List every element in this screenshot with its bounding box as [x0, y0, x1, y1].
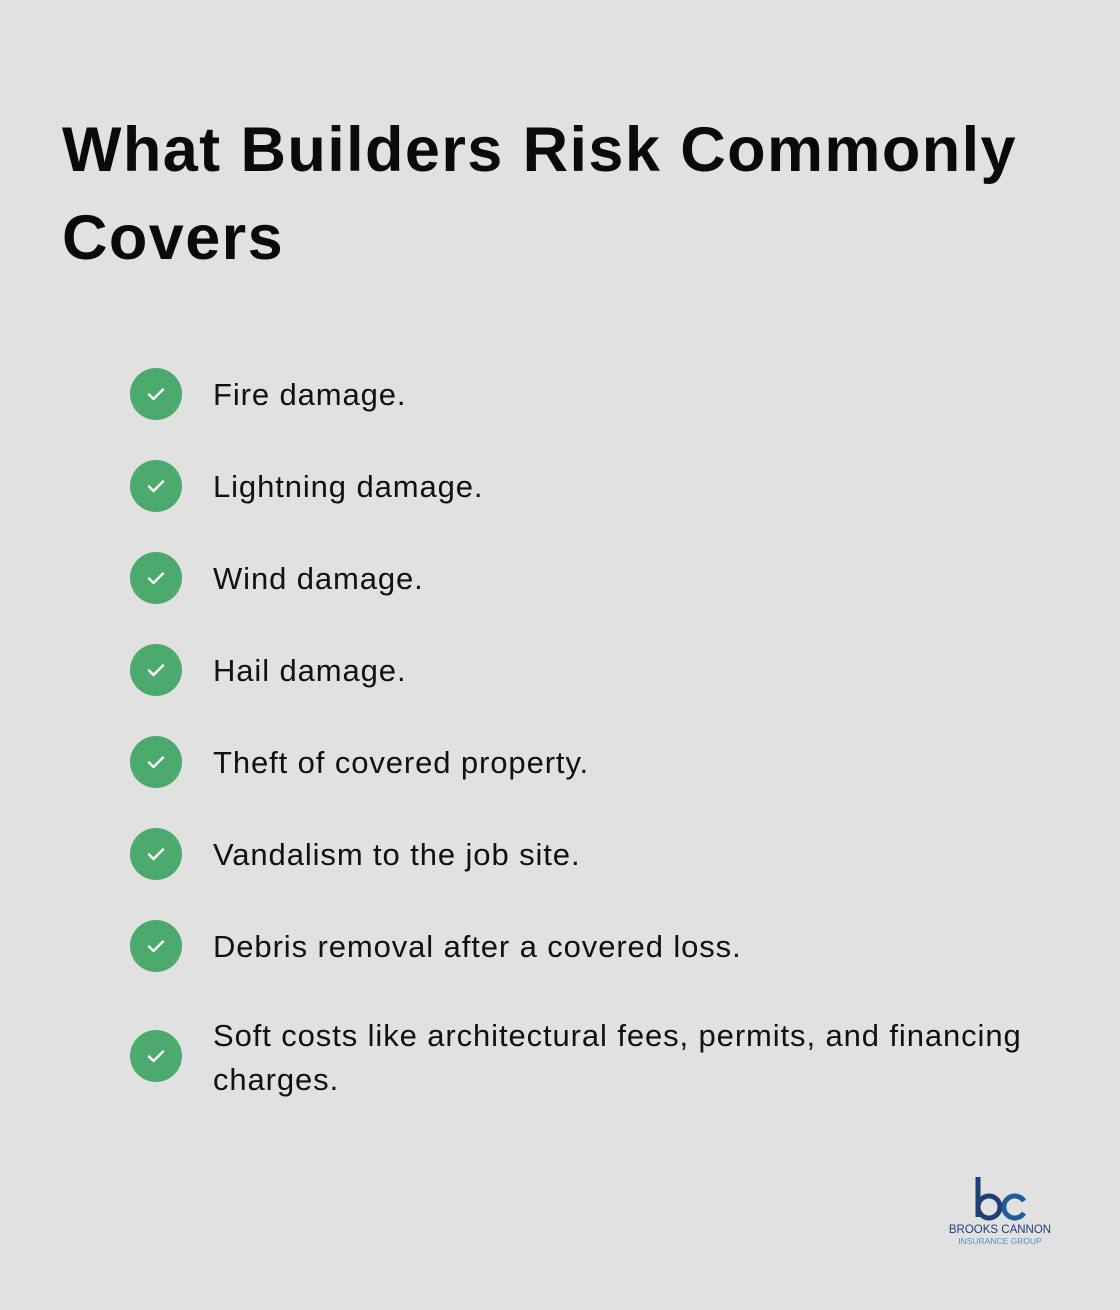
- logo: [949, 1177, 1051, 1246]
- logo: BROOKS CANNON: [949, 1224, 1051, 1236]
- item: hail: [130, 644, 406, 696]
- item: debris: Debris removal after a covered loss.: [213, 929, 742, 964]
- item: fire: Fire damage.: [213, 377, 406, 412]
- item: theft: [130, 736, 589, 788]
- item: soft costs: Soft costs like architectural fees, permits, and financing charges.: [213, 1018, 1022, 1097]
- title: What Builders Risk Commonly Covers: [62, 115, 1017, 273]
- item: theft: Theft of covered property.: [213, 745, 589, 780]
- item: debris: [130, 920, 742, 972]
- item: hail: Hail damage.: [213, 653, 406, 688]
- logo: INSURANCE GROUP: [958, 1236, 1042, 1246]
- item: fire: [130, 368, 406, 420]
- item: wind: Wind damage.: [213, 561, 424, 596]
- item: lightning: Lightning damage.: [213, 469, 483, 504]
- item: lightning: [130, 460, 483, 512]
- item: vandalism: Vandalism to the job site.: [213, 837, 580, 872]
- item: vandalism: [130, 828, 580, 880]
- item: wind: [130, 552, 424, 604]
